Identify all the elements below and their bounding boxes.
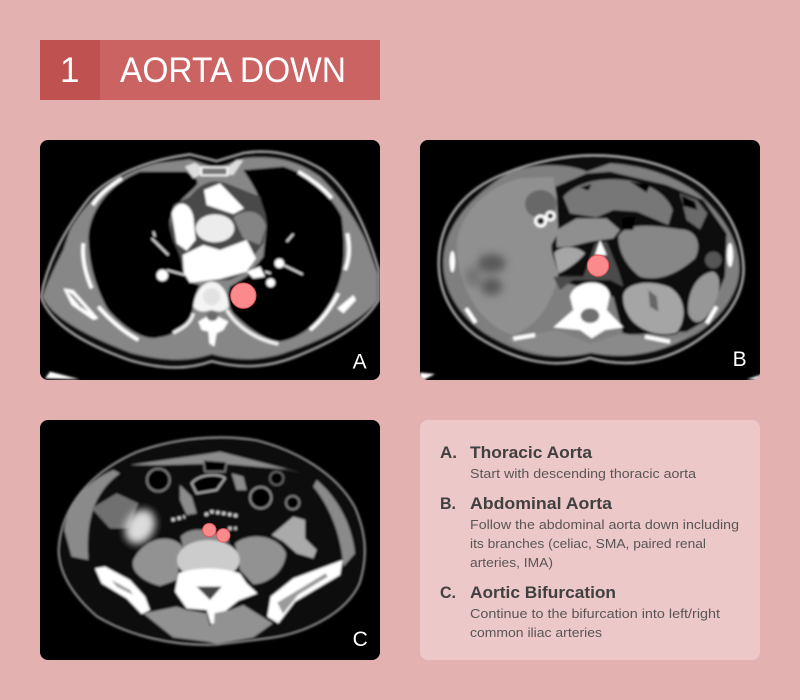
item C: Continue to the bifurcation into left/right — [470, 606, 720, 621]
panel: key to scans — [420, 420, 760, 660]
liver — [457, 177, 558, 335]
iliac wings — [95, 567, 150, 614]
left common iliac highlight — [203, 523, 216, 537]
aorta highlight — [587, 255, 609, 276]
item A: A. — [440, 444, 457, 462]
item A: Start with descending thoracic aorta — [470, 466, 697, 481]
item B: Follow the abdominal aorta down including — [470, 517, 739, 532]
ribs — [450, 251, 455, 272]
item B: its branches (celiac, SMA, paired renal — [470, 536, 706, 551]
psoas muscles — [133, 539, 183, 586]
heart — [170, 181, 267, 282]
item A: Thoracic Aorta — [470, 444, 593, 462]
title banner — [40, 40, 380, 100]
panel: CT scan A thoracic aorta — [40, 140, 380, 380]
item B — [440, 495, 739, 570]
panel: CT scan B abdominal aorta — [420, 140, 760, 380]
back muscles — [143, 605, 273, 644]
panel: CT scan C aortic bifurcation — [40, 420, 380, 660]
IVC — [554, 247, 585, 273]
heading: AORTA DOWN — [120, 51, 346, 90]
gallbladder — [525, 190, 556, 218]
spine — [193, 282, 229, 311]
item C: Aortic Bifurcation — [470, 584, 616, 602]
item B: arteries, IMA) — [470, 555, 553, 570]
item A — [440, 444, 697, 481]
back muscles — [507, 330, 690, 356]
item B: B. — [440, 495, 456, 513]
right common iliac highlight — [217, 529, 230, 542]
panel letter: B — [733, 348, 747, 371]
vessels in lungs — [157, 270, 168, 281]
item C — [440, 584, 720, 640]
spine — [553, 283, 623, 338]
spine — [176, 538, 241, 573]
kidneys and spleen — [622, 282, 684, 335]
ribs and scapulae — [83, 172, 349, 340]
section number: 1 — [60, 51, 79, 90]
aorta highlight — [231, 283, 256, 308]
item C: C. — [440, 584, 456, 602]
section number — [40, 40, 100, 100]
vessels — [172, 512, 238, 528]
sternum — [185, 160, 243, 178]
abdominal fat — [552, 172, 727, 335]
bowel — [563, 179, 673, 225]
item C: common iliac arteries — [470, 625, 603, 640]
bowel — [92, 493, 138, 528]
panel letter: C — [353, 628, 368, 651]
item B: Abdominal Aorta — [470, 495, 613, 513]
retroperitoneum — [553, 242, 623, 290]
panel letter: A — [353, 350, 367, 373]
